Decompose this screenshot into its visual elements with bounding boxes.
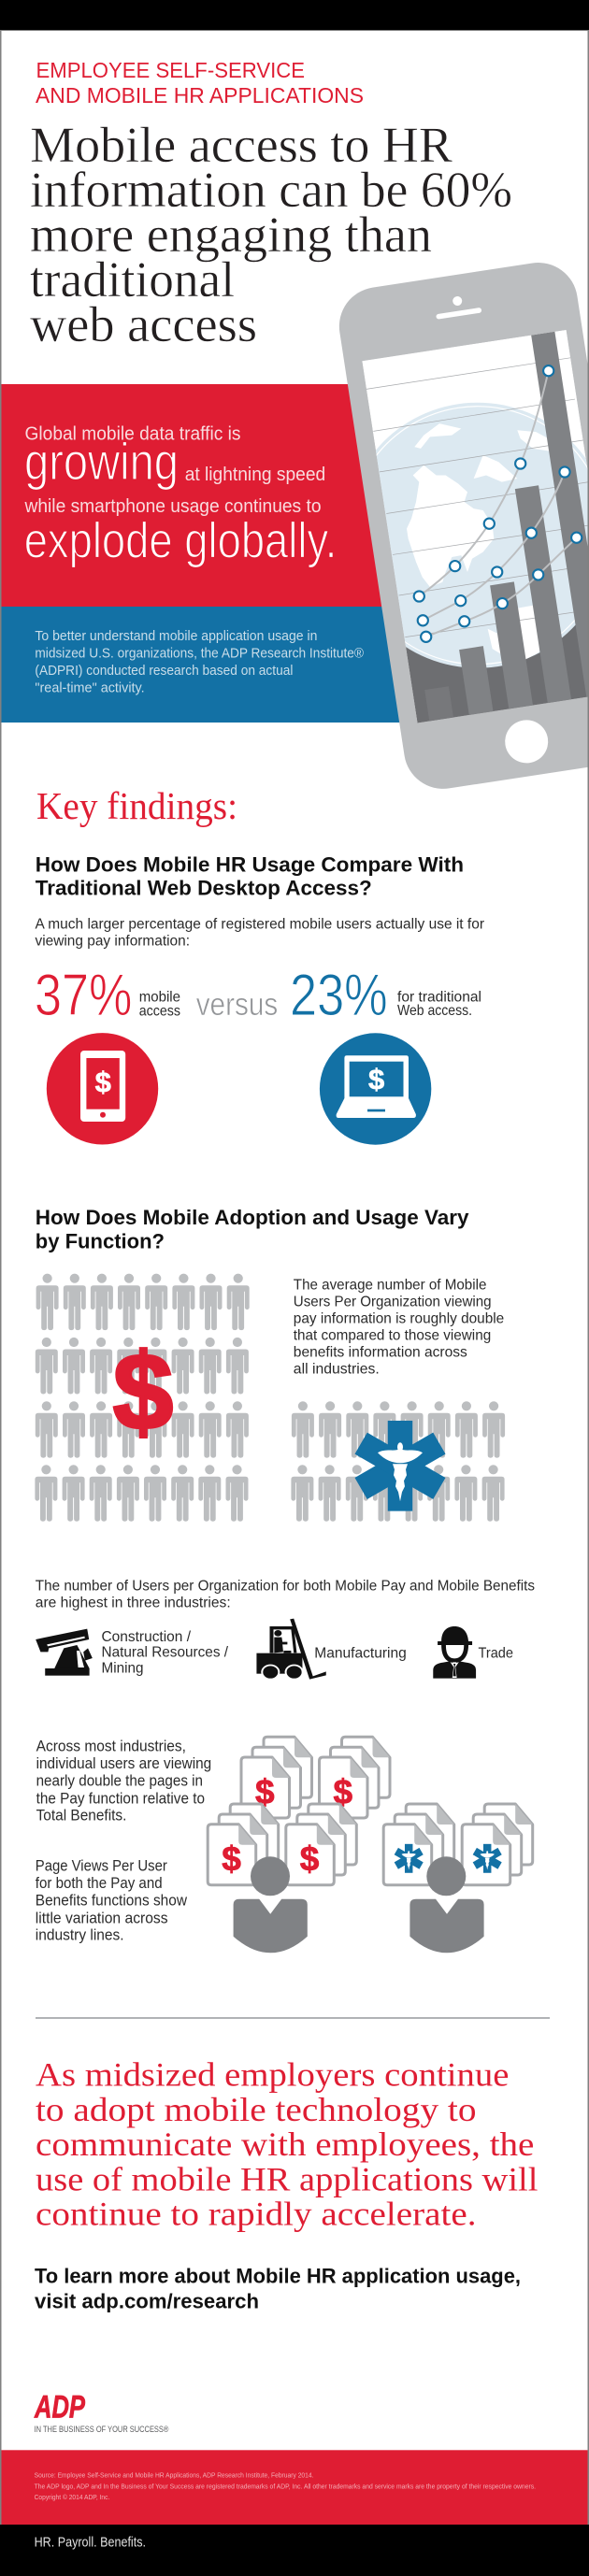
text: mobile traffic lines (24, 423, 325, 517)
eyebrow heading (36, 58, 364, 107)
icon: user with pay document stacks: $ (334, 1772, 353, 1811)
text: HR Payroll Benefits: HR. Payroll. Benefits. (35, 2534, 146, 2550)
panel: red source footer (0, 2450, 589, 2525)
icon: user with pay document stacks: $ (255, 1772, 275, 1811)
text: versus: versus (196, 987, 278, 1023)
eyebrow heading: AND MOBILE HR APPLICATIONS (36, 83, 364, 107)
text: research intro (35, 628, 364, 696)
heading: mobile vs web: How Does Mobile HR Usage Compare With (36, 852, 464, 876)
text: registered users intro: A much larger percentage of registered mobile users actually use it for (36, 916, 484, 932)
text: page views per user: Benefits functions show (36, 1893, 187, 1910)
tagline: IN THE BUSINESS OF YOUR SUCCESS® (35, 2425, 169, 2434)
text: mobile traffic lines: Global mobile data traffic is (24, 423, 241, 445)
icon: red circle phone with dollar: $ (95, 1066, 111, 1098)
text: mobile traffic lines: while smartphone usage continues to (24, 495, 322, 517)
text: page views relative to benefits (36, 1738, 211, 1825)
text: page views per user: for both the Pay and (36, 1875, 163, 1892)
stat: 37 percent mobile access: access (139, 1003, 180, 1019)
text: mobile users per organization (294, 1277, 504, 1377)
icon: user with pay document stacks: $ (222, 1839, 241, 1878)
text: mobile users per organization: that compared to those viewing (294, 1327, 491, 1343)
text: research intro: "real-time" activity. (35, 680, 145, 696)
text: closing statement: use of mobile HR applications will (36, 2160, 539, 2197)
heading: mobile vs web: Traditional Web Desktop Access? (36, 877, 372, 900)
text: explode globally: explode globally. (24, 513, 337, 569)
text: page views per user (36, 1857, 187, 1944)
icon: smartphone with globe and chart (338, 263, 587, 789)
stat: 23 percent web access: 23% (290, 963, 388, 1028)
text: three industries intro: are highest in three industries: (36, 1596, 231, 1611)
logo: ADP (34, 2390, 169, 2434)
icon: hard hat worker (433, 1626, 476, 1679)
text: mobile users per organization: benefits information across (294, 1344, 467, 1360)
text: page views relative to benefits: Across most industries, (36, 1738, 186, 1754)
eyebrow heading: EMPLOYEE SELF-SERVICE (36, 58, 305, 82)
text: page views relative to benefits: individual users are viewing (36, 1755, 211, 1772)
text: mobile traffic lines: at lightning speed (185, 464, 325, 485)
icon: oil pump jack (36, 1629, 93, 1676)
text: growing: growing (24, 432, 179, 491)
stat: 37 percent mobile access: mobile (139, 990, 180, 1006)
icon: user with benefits document stacks (383, 1804, 533, 1953)
text: page views per user: industry lines. (36, 1927, 124, 1944)
text: construction label: Construction / (101, 1629, 192, 1645)
text: mobile users per organization: The average number of Mobile (294, 1277, 486, 1293)
text: call to action: To learn more about Mobile HR application usage, (35, 2264, 521, 2287)
icon: blue star of life (355, 1421, 445, 1511)
text: page views relative to benefits: the Pay function relative to (36, 1790, 205, 1807)
text: source and copyright (35, 2473, 536, 2501)
text: research intro: (ADPRI) conducted research based on actual (35, 663, 293, 679)
text: mobile users per organization: all industries. (294, 1361, 380, 1377)
text: trade label: Trade (479, 1645, 513, 1661)
main title: more engaging than (30, 207, 432, 263)
text: source and copyright: Source: Employee Self-Service and Mobile HR Applications, ADP Research Institute, February 2014. (35, 2473, 314, 2480)
text: page views per user: Page Views Per User (36, 1857, 167, 1874)
text: three industries intro (36, 1579, 535, 1611)
panel: blue research intro (0, 607, 449, 723)
chart on phone screen (363, 330, 587, 723)
icon: red circle phone with dollar (47, 1033, 158, 1145)
text: registered users intro: viewing pay information: (36, 933, 190, 949)
pictogram: benefits users grid (291, 1401, 505, 1522)
line curves (419, 371, 577, 637)
text: call to action: visit adp.com/research (35, 2289, 259, 2312)
heading: key findings: Key findings: (36, 784, 237, 827)
stat: 37 percent mobile access: 37% (35, 963, 132, 1028)
text: call to action (35, 2264, 521, 2312)
text: page views relative to benefits: Total Benefits. (36, 1808, 126, 1825)
text: mobile users per organization: pay information is roughly double (294, 1310, 504, 1326)
stat: 23 percent web access: for traditional (397, 990, 481, 1006)
icon: forklift (256, 1619, 326, 1680)
logo: ADP: ADP (34, 2390, 85, 2426)
main title: Mobile access to HR (30, 117, 453, 173)
heading: adoption by function: by Function? (36, 1229, 165, 1252)
data point markers (414, 365, 582, 642)
text: registered users intro (36, 916, 484, 949)
text: source and copyright: Copyright © 2014 ADP, Inc. (35, 2494, 109, 2501)
text: construction label (101, 1629, 229, 1677)
top black bar (0, 0, 589, 30)
text: construction label: Natural Resources / (101, 1645, 229, 1661)
main title (30, 117, 512, 352)
heading: adoption by function: How Does Mobile Adoption and Usage Vary (36, 1206, 469, 1229)
text: construction label: Mining (101, 1661, 144, 1677)
text: closing statement: communicate with employees, the (36, 2125, 534, 2163)
text: research intro: midsized U.S. organizations, the ADP Research Institute® (35, 645, 364, 661)
text: closing statement: continue to rapidly accelerate. (36, 2196, 477, 2233)
text: three industries intro: The number of Users per Organization for both Mobile Pay and Mobile Benefits (36, 1579, 535, 1595)
main title: web access (30, 296, 257, 352)
text: mobile users per organization: Users Per Organization viewing (294, 1294, 492, 1309)
heading: mobile vs web (36, 852, 464, 900)
icon: blue circle laptop with dollar: $ (368, 1063, 384, 1095)
text: closing statement: As midsized employers continue (36, 2056, 509, 2094)
main title: information can be 60% (30, 162, 512, 218)
main title: traditional (30, 251, 235, 308)
panel: red mobile traffic statement (0, 384, 449, 607)
icon: blue circle laptop with dollar (320, 1033, 431, 1145)
text: research intro: To better understand mobile application usage in (35, 628, 317, 644)
text: page views per user: little variation across (36, 1910, 168, 1926)
icon: large red dollar: $ (113, 1331, 173, 1453)
stat: 23 percent web access: Web access. (397, 1003, 472, 1019)
pictogram: pay users grid (35, 1274, 250, 1522)
panel: black brand footer (0, 2525, 589, 2576)
heading: adoption by function (36, 1206, 469, 1252)
icon: user with pay document stacks (208, 1737, 390, 1953)
stat: 23 percent web access (290, 963, 481, 1028)
text: page views relative to benefits: nearly double the pages in (36, 1773, 203, 1790)
text: closing statement: to adopt mobile technology to (36, 2091, 477, 2128)
text: manufacturing label: Manufacturing (314, 1645, 407, 1661)
text: source and copyright: The ADP logo, ADP and In the Business of Your Success are registered trademarks of ADP, Inc. All other trademarks and service marks are the property of their respective owners. (35, 2483, 536, 2490)
text: closing statement (36, 2056, 539, 2233)
icon: user with pay document stacks: $ (300, 1839, 320, 1878)
